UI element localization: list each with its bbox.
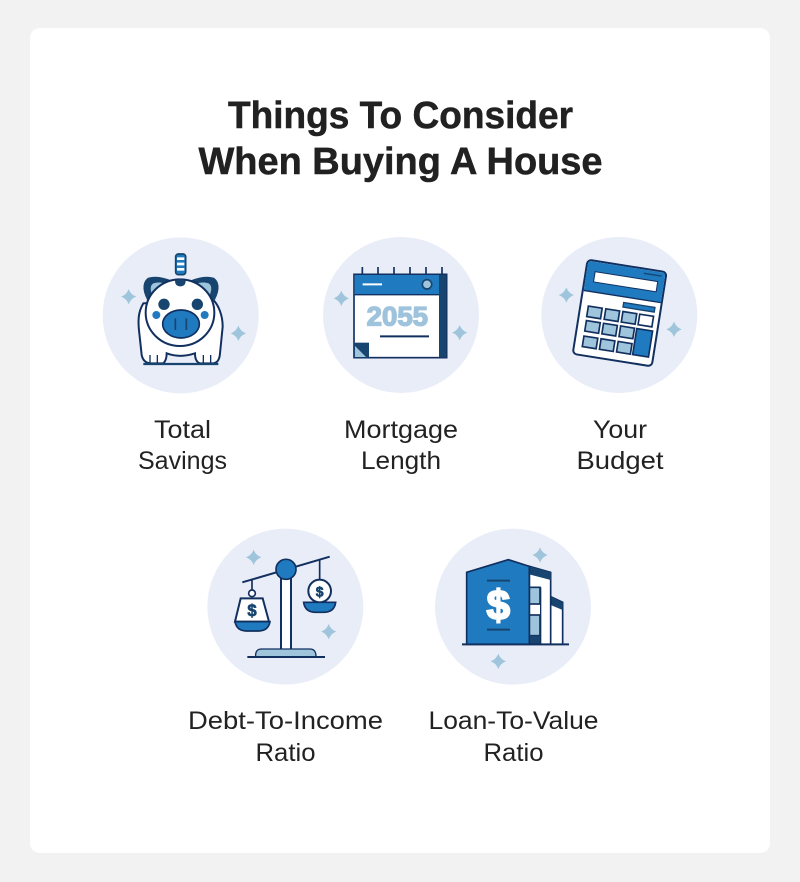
item: debt-to-income ratio (188, 529, 383, 767)
label: debt-to-income ratio: Debt-To-Income (188, 707, 383, 735)
label: your budget: Your (593, 416, 647, 444)
label: your budget (576, 416, 664, 475)
label: loan-to-value ratio (428, 707, 598, 767)
item: mortgage length (323, 237, 479, 475)
label: mortgage length: Mortgage (344, 416, 458, 444)
icon: balance scale: $ (316, 583, 324, 599)
label: total savings (138, 416, 227, 475)
icon: balance scale (207, 529, 363, 685)
title: When Buying A House (198, 141, 602, 183)
icon: balance scale: $ (247, 601, 257, 620)
label: loan-to-value ratio: Loan-To-Value (428, 707, 598, 735)
icon: building with dollar sign: $ (487, 581, 510, 628)
item: loan-to-value ratio (428, 529, 598, 767)
icon: calculator (541, 237, 697, 393)
label: your budget: Budget (576, 447, 664, 475)
icon: calendar: 2055 (367, 302, 428, 332)
label: total savings: Savings (138, 447, 227, 475)
label: debt-to-income ratio (188, 707, 383, 767)
icon: calendar (323, 237, 479, 393)
label: mortgage length (344, 416, 458, 475)
item: your budget (541, 237, 697, 475)
label: mortgage length: Length (361, 447, 441, 475)
item: total savings (103, 237, 259, 475)
icon: building with dollar sign (435, 529, 591, 685)
title: Things To Consider (228, 95, 573, 137)
label: loan-to-value ratio: Ratio (484, 739, 544, 767)
title (198, 95, 602, 183)
label: debt-to-income ratio: Ratio (256, 739, 316, 767)
icon: piggy bank (103, 237, 259, 393)
label: total savings: Total (154, 416, 211, 444)
